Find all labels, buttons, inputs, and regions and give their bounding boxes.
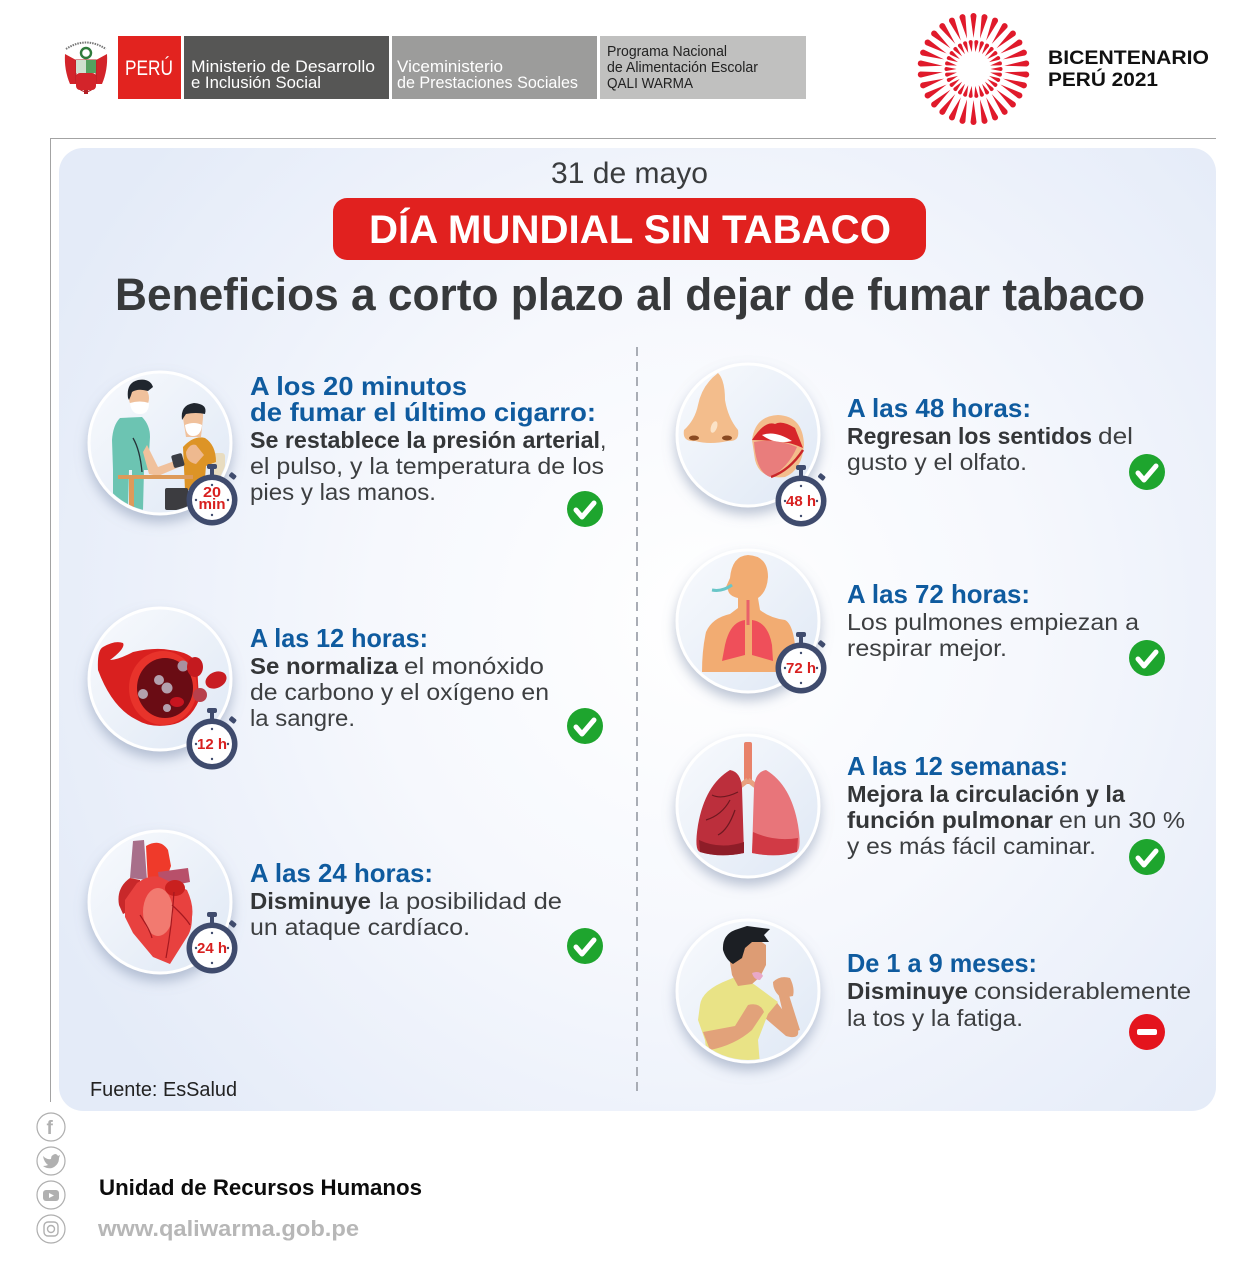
logo block: Qali Warma: de Alimentación Escolar xyxy=(607,59,758,76)
text: 48 hours xyxy=(847,393,1133,475)
text: 20 minutes: , xyxy=(600,427,606,453)
timer: 20 min: min xyxy=(198,496,226,513)
text: 20 minutes: A los 20 minutos xyxy=(250,371,467,401)
banner xyxy=(333,198,926,260)
text: 12 hours: la sangre. xyxy=(250,705,355,731)
text: 20 minutes: pies y las manos. xyxy=(250,479,436,505)
text: 12 hours: de carbono y el oxígeno en xyxy=(250,679,549,705)
text: 72 hours: Los pulmones empiezan a xyxy=(847,609,1139,635)
timer: 12 h: 12 h xyxy=(197,736,227,753)
text: 1 to 9 months: Disminuye xyxy=(847,978,968,1004)
text: 48 hours: A las 48 horas: xyxy=(847,393,1031,423)
text: 12 hours: Se normaliza xyxy=(250,653,398,679)
logo: Bicentenario sunburst xyxy=(917,13,1030,125)
timer: 24 h xyxy=(186,912,238,974)
logo block: Qali Warma: QALI WARMA xyxy=(607,75,693,92)
circle: 12 hours, blood vessel xyxy=(89,608,231,750)
text: 72 hours: respirar mejor. xyxy=(847,635,1007,661)
logo text: Bicentenario Perú 2021 xyxy=(1048,48,1209,91)
footer: website: www.qaliwarma.gob.pe xyxy=(97,1216,359,1241)
text: 12 weeks: Mejora la circulación y la xyxy=(847,781,1125,807)
text: 24 hours xyxy=(250,858,562,940)
text: 48 hours: gusto y el olfato. xyxy=(847,449,1027,475)
timer: 72 h xyxy=(776,632,826,694)
icon: youtube xyxy=(37,1181,65,1209)
text: 1 to 9 months: la tos y la fatiga. xyxy=(847,1005,1023,1031)
text: 20 minutes: de fumar el último cigarro: xyxy=(250,397,596,427)
text: 48 hours: del xyxy=(1098,423,1133,449)
timer: 24 h: 24 h xyxy=(197,940,227,957)
timer: 48 h: 48 h xyxy=(786,493,816,510)
text: 48 hours: Regresan los sentidos xyxy=(847,423,1092,449)
logo block: Viceministerio: de Prestaciones Sociales xyxy=(397,73,578,92)
text: 1 to 9 months xyxy=(847,948,1191,1031)
text: 20 minutes xyxy=(250,371,606,505)
logo text: Bicentenario Perú 2021: BICENTENARIO xyxy=(1048,48,1209,69)
logo block: Perú xyxy=(118,36,181,99)
timer: 12 h xyxy=(186,708,238,770)
icon: facebook xyxy=(37,1113,65,1141)
text: 12 weeks: en un 30 % xyxy=(1059,807,1185,833)
text: 12 weeks: y es más fácil caminar. xyxy=(847,833,1096,859)
logo block: Qali Warma: Programa Nacional xyxy=(607,43,727,60)
text: 24 hours: Disminuye xyxy=(250,888,371,914)
logo block: Viceministerio xyxy=(392,36,597,99)
icon: check xyxy=(567,491,603,527)
text: 20 minutes: el pulso, y la temperatura de los xyxy=(250,453,604,479)
logo block: Viceministerio: Viceministerio xyxy=(397,57,503,76)
logo block: Ministerio xyxy=(184,36,389,99)
timer: 20 min xyxy=(186,464,238,526)
banner: DÍA MUNDIAL SIN TABACO xyxy=(369,207,891,252)
icon: facebook: f xyxy=(46,1118,54,1139)
timer: 72 h: 72 h xyxy=(786,660,816,677)
circle: 48 hours, nose and mouth xyxy=(677,364,819,506)
logo block: Ministerio: Ministerio de Desarrollo xyxy=(191,57,375,76)
text: 72 hours xyxy=(847,579,1139,661)
icon: check xyxy=(1129,839,1165,875)
frame lines xyxy=(50,138,1216,1102)
circle: 1 to 9 months, coughing man xyxy=(677,920,819,1065)
timer: 20 min: 20 xyxy=(203,484,221,501)
icon: minus sign xyxy=(1129,1014,1165,1050)
text: 12 weeks: A las 12 semanas: xyxy=(847,751,1068,781)
logo: Peru coat of arms xyxy=(65,42,107,94)
text: 12 hours: A las 12 horas: xyxy=(250,623,428,653)
icon: check xyxy=(567,928,603,964)
icon: check xyxy=(1129,640,1165,676)
source: Fuente: EsSalud xyxy=(90,1079,237,1101)
icon: twitter xyxy=(37,1147,65,1175)
text: 12 weeks: función pulmonar xyxy=(847,807,1053,833)
text: 1 to 9 months: De 1 a 9 meses: xyxy=(847,948,1037,978)
footer: unit name: Unidad de Recursos Humanos xyxy=(99,1175,422,1200)
text: 12 weeks xyxy=(847,751,1185,859)
text: 12 hours xyxy=(250,623,549,731)
logo block: Qali Warma xyxy=(600,36,806,99)
text: 72 hours: A las 72 horas: xyxy=(847,579,1030,609)
title: Beneficios a corto plazo al dejar de fumar tabaco xyxy=(115,269,1145,320)
text: 20 minutes: Se restablece la presión arterial xyxy=(250,427,600,453)
circle: 20 minutes, blood pressure check xyxy=(89,372,231,514)
text: 1 to 9 months: considerablemente xyxy=(974,978,1191,1004)
column divider xyxy=(636,347,638,1096)
icon: check xyxy=(567,708,603,744)
circle: 72 hours, respiration xyxy=(677,550,819,692)
circle: 24 hours, heart xyxy=(89,831,231,973)
panel: background xyxy=(59,148,1216,1111)
logo block: Ministerio: e Inclusión Social xyxy=(191,73,321,92)
text: 24 hours: A las 24 horas: xyxy=(250,858,433,888)
timer: 48 h xyxy=(776,465,826,526)
text: 24 hours: la posibilidad de xyxy=(379,888,562,914)
text: 24 hours: un ataque cardíaco. xyxy=(250,914,470,940)
icon: instagram xyxy=(37,1215,65,1243)
icon: check xyxy=(1129,454,1165,490)
circle: 12 weeks, lungs xyxy=(677,735,819,877)
date: 31 de mayo xyxy=(551,157,708,190)
logo block: Perú: PERÚ xyxy=(125,57,173,80)
logo text: Bicentenario Perú 2021: PERÚ 2021 xyxy=(1048,69,1158,91)
text: 12 hours: el monóxido xyxy=(404,653,544,679)
